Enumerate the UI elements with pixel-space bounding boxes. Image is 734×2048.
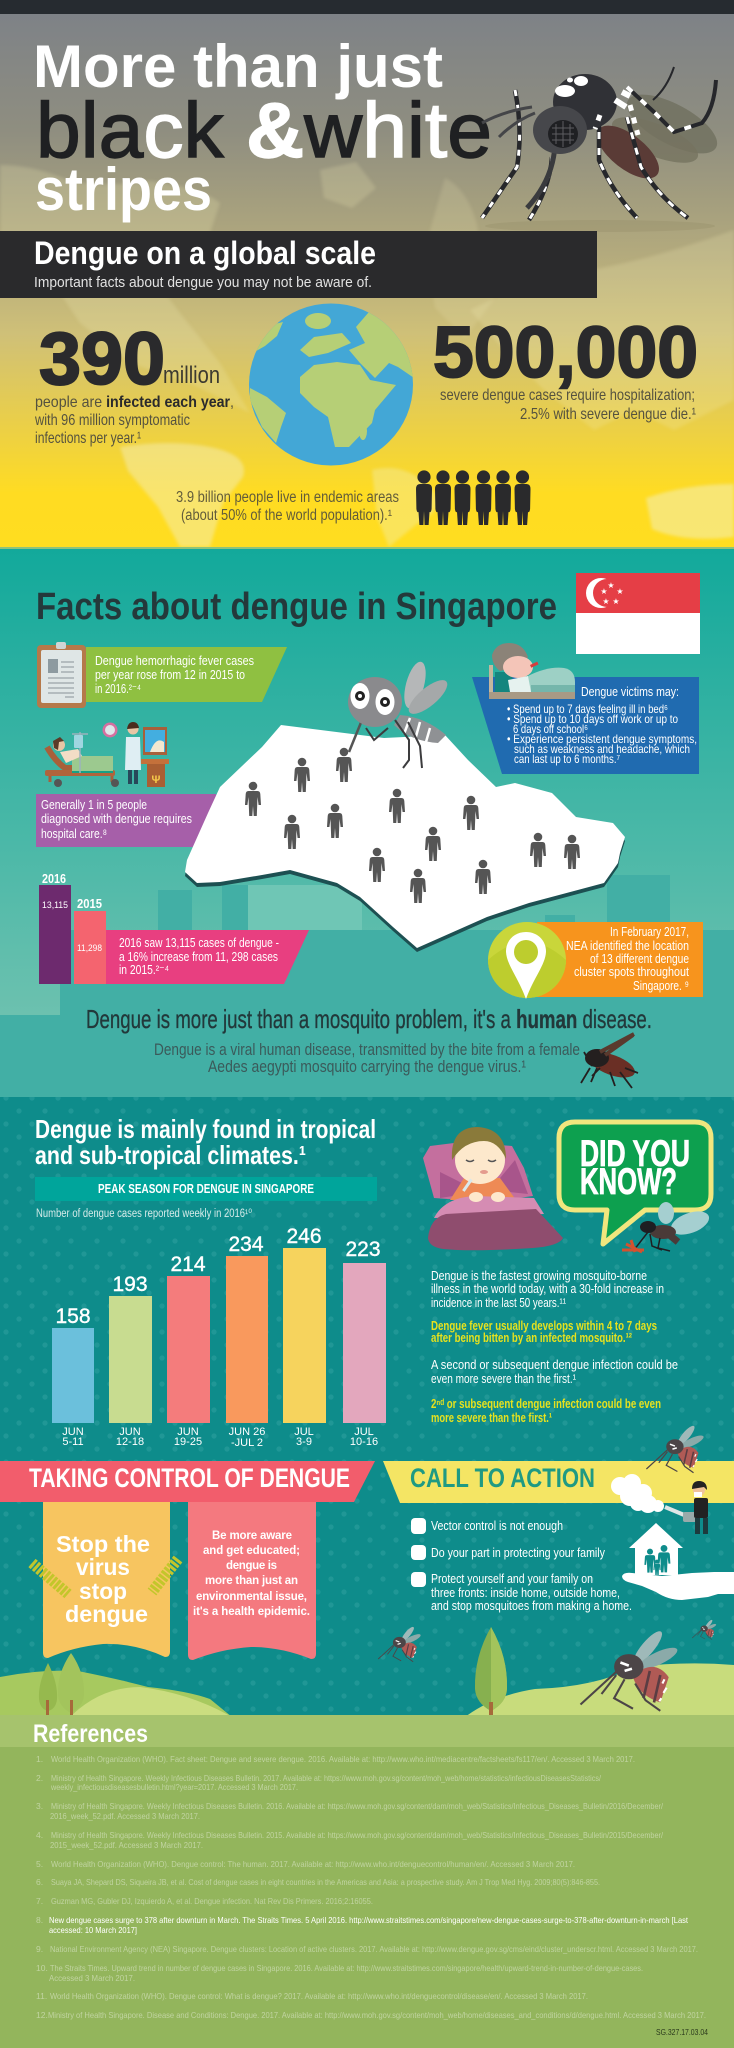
callout: 2016 cases increase: 2016 saw 13,115 cases of dengue -	[119, 935, 279, 950]
bar chart: weekly dengue cases: JUL	[354, 1426, 374, 1438]
callout: dengue victims may: such as weakness and headache, which	[514, 742, 690, 756]
panel: references: Guzman MG, Gubler DJ, Izquierdo A, et al. Dengue infection. Nat Rev Dis Primers. 2016;2:16055.	[51, 1896, 373, 1906]
bar chart: weekly dengue cases: 246	[286, 1225, 322, 1248]
bar chart: weekly dengue cases	[36, 1208, 386, 1449]
banner: call to action: CALL TO ACTION	[410, 1463, 595, 1493]
bar chart: weekly dengue cases: 19-25	[174, 1436, 202, 1448]
panel: references: SG.327.17.03.04	[656, 2027, 708, 2037]
icon: house with family	[629, 1523, 683, 1575]
text block: did you know facts: more severe than the first.¹	[431, 1410, 552, 1425]
panel: references: World Health Organization (WHO). Dengue control: What is dengue? 2017. Available at: http://www.who.int/denguecontrol/disease/en/. Accessed 3 March 2017.	[50, 1991, 588, 2001]
panel: references: World Health Organization (WHO). Dengue control: The human. 2017. Available at: http://www.who.int/denguecontrol/human/en/. Accessed 3 March 2017.	[51, 1859, 575, 1869]
banner: call to action	[383, 1461, 734, 1503]
title: black &white	[36, 86, 492, 174]
panel: references: World Health Organization (WHO). Fact sheet: Dengue and severe dengue. 2016. Available at: http://www.who.int/mediacentre/factsheets/fs117/en/. Accessed 3 March 2017.	[51, 1754, 635, 1764]
icon: mosquito top right	[646, 1424, 705, 1473]
ribbon: be more aware: it's a health epidemic.	[193, 1606, 310, 1618]
chart: 2016 vs 2015 cases	[39, 871, 106, 984]
callout: hospital care: hospital care.⁸	[41, 826, 107, 841]
text block: did you know facts: A second or subsequent dengue infection could be	[431, 1357, 678, 1372]
icon: mosquito center	[378, 1625, 422, 1662]
text block: did you know facts	[431, 1268, 678, 1425]
panel: references: The Straits Times. Upward trend in number of dengue cases in Singapore. 2016. Available at: http://www.straitstimes.com/singapore/health/upward-trend-in-number-of-dengue-cases.	[50, 1963, 643, 1973]
panel: references	[0, 1715, 734, 2048]
bar chart: weekly dengue cases: 214	[170, 1253, 206, 1276]
checklist: call to action items: and stop mosquitoes from making a home.	[431, 1598, 632, 1613]
checklist: call to action items	[411, 1518, 632, 1613]
callout: dengue victims may: • Experience persistent dengue symptoms,	[507, 732, 697, 746]
checklist: call to action items: three fronts: inside home, outside home,	[431, 1585, 620, 1600]
callout: hemorrhagic fever cases: per year rose from 12 in 2015 to	[95, 667, 245, 682]
ribbon: be more aware: environmental issue,	[196, 1591, 307, 1603]
checklist: call to action items: Vector control is not enough	[431, 1518, 563, 1533]
panel: references: 5.	[36, 1859, 43, 1869]
panel: references: 2016_week_52.pdf. Accessed 3 March 2017.	[50, 1811, 200, 1821]
panel: references: accessed: 10 March 2017]	[49, 1925, 137, 1935]
callout: dengue victims may: Dengue victims may:	[581, 684, 679, 699]
callout: dengue cluster spots: NEA identified the location	[566, 939, 689, 953]
panel: references: 11.	[36, 1991, 47, 2001]
callout: dengue cluster spots: In February 2017,	[610, 925, 689, 939]
stat: 3.9 billion people	[176, 470, 530, 525]
callout: dengue cluster spots: cluster spots throughout	[574, 965, 689, 979]
callout: 2016 cases increase: in 2015.²⁻⁴	[119, 962, 169, 977]
icon: sick woman in bed	[489, 643, 575, 699]
banner: peak season: PEAK SEASON FOR DENGUE IN SINGAPORE	[98, 1181, 314, 1196]
panel: tropical climates background	[0, 1097, 734, 1717]
callout: hemorrhagic fever cases: in 2016.²⁻⁴	[95, 681, 141, 696]
stat: 390 million: million	[163, 362, 220, 389]
section banner: dengue on a global scale: Important facts about dengue you may not be aware of.	[34, 274, 372, 291]
chart: 2016 vs 2015 cases: 13,115	[42, 900, 68, 910]
panel: references: 2015_week_52.pdf. Accessed 3 March 2017.	[50, 1840, 203, 1850]
ribbon: be more aware: dengue is	[226, 1560, 277, 1572]
icon: left laurel	[32, 1563, 68, 1594]
bar chart: weekly dengue cases: 223	[345, 1238, 381, 1261]
bar chart: weekly dengue cases: -JUL 2	[231, 1437, 263, 1449]
callout: dengue victims may: • Spend up to 10 days off work or up to	[507, 712, 678, 726]
text block: did you know facts: Dengue fever usually develops within 4 to 7 days	[431, 1318, 657, 1333]
text block: did you know facts: illness in the world today, with a 30-fold increase in	[431, 1281, 664, 1296]
bar chart: weekly dengue cases: 10-16	[350, 1436, 378, 1448]
callout: hemorrhagic fever cases: Dengue hemorrhagic fever cases	[95, 653, 254, 668]
icon: open hand	[622, 1572, 734, 1600]
chart: 2016 vs 2015 cases: 11,298	[77, 943, 102, 953]
callout: did you know bubble: DID YOU	[580, 1133, 690, 1174]
banner: taking control of dengue: TAKING CONTROL OF DENGUE	[29, 1463, 350, 1493]
panel: references: weekly_infectiousdiseasesbulletin.html?year=2017. Accessed 3 March 2017.	[50, 1782, 298, 1792]
banner: peak season	[35, 1177, 377, 1201]
icon: cartoon mosquito	[348, 659, 452, 768]
panel: references: 10.	[36, 1963, 48, 1973]
bar chart: weekly dengue cases: JUN	[62, 1426, 84, 1438]
ribbon: stop the virus	[43, 1502, 170, 1658]
icon: small dark mosquito	[581, 1034, 638, 1088]
callout: dengue victims may: • Spend up to 7 days feeling ill in bed⁶	[507, 702, 668, 716]
callout: hospital care: diagnosed with dengue requires	[41, 811, 192, 826]
callout: hospital care: Generally 1 in 5 people	[41, 797, 147, 812]
stat: 390 million: people are infected each year,	[35, 394, 234, 411]
panel: Singapore background and skyline	[0, 547, 734, 1097]
callout: did you know bubble	[559, 1122, 711, 1244]
chart: 2016 vs 2015 cases: 2016	[42, 871, 66, 886]
bar chart: weekly dengue cases: JUN	[119, 1426, 141, 1438]
bar chart: weekly dengue cases: 3-9	[296, 1436, 312, 1448]
callout: 2016 cases increase	[106, 930, 309, 984]
heading: tropical climates: and sub-tropical climates.¹	[35, 1140, 306, 1170]
checklist: call to action items: Do your part in protecting your family	[431, 1545, 605, 1560]
panel: references: 4.	[36, 1830, 43, 1840]
callout: dengue cluster spots: of 13 different dengue	[590, 952, 689, 966]
ribbon: stop the virus: dengue	[65, 1601, 148, 1627]
callout: dengue cluster spots	[537, 922, 703, 997]
text block: human disease	[86, 1004, 652, 1076]
section banner: dengue on a global scale: Dengue on a global scale	[34, 235, 376, 271]
bar chart: weekly dengue cases: JUN	[177, 1426, 199, 1438]
callout: did you know bubble: KNOW?	[580, 1161, 677, 1202]
panel: references: 8.	[36, 1915, 43, 1925]
panel: global scale background	[0, 0, 734, 547]
stat: 3.9 billion people: 3.9 billion people live in endemic areas	[176, 489, 399, 506]
bar chart: weekly dengue cases: 193	[112, 1273, 148, 1296]
bar chart: weekly dengue cases: 12-18	[116, 1436, 144, 1448]
panel: references: Accessed 3 March 2017.	[49, 1973, 135, 1983]
text block: did you know facts: even more severe than the first.¹	[431, 1371, 577, 1386]
chart: 2016 vs 2015 cases: 2015	[77, 896, 102, 911]
banner: taking control of dengue	[0, 1461, 375, 1502]
icon: hospital patient and doctor	[45, 722, 169, 787]
title: More than just	[33, 33, 443, 100]
ribbon: stop the virus: stop	[79, 1578, 127, 1604]
ribbon: be more aware: Be more aware	[212, 1530, 292, 1542]
icon: fogging man with smoke cloud	[611, 1474, 708, 1534]
text block: did you know facts: Dengue is the fastest growing mosquito-borne	[431, 1268, 647, 1283]
bar chart: weekly dengue cases: 158	[55, 1305, 91, 1328]
icon: sick boy in bed	[423, 1127, 563, 1250]
icon: location pin	[488, 922, 566, 999]
icon: Singapore flag: ★	[600, 587, 608, 596]
icon: Singapore flag: ★	[616, 587, 624, 596]
callout: hospital care	[36, 794, 216, 847]
stat: 390 million: 390	[39, 317, 165, 400]
panel: references: References	[33, 1720, 148, 1748]
icon: mosquito far right	[692, 1619, 717, 1640]
title	[33, 33, 492, 223]
text block: human disease: Dengue is a viral human disease, transmitted by the bite from a female	[154, 1040, 580, 1059]
icon: Singapore flag: ★	[607, 581, 615, 590]
icon: globe	[249, 304, 417, 466]
bar chart: weekly dengue cases: 234	[228, 1233, 264, 1256]
callout: 2016 cases increase: a 16% increase from 11, 298 cases	[119, 949, 278, 964]
callout: dengue cluster spots: Singapore. ⁹	[633, 979, 689, 993]
bar chart: weekly dengue cases: JUN 26	[229, 1426, 265, 1438]
ribbon: be more aware	[188, 1502, 316, 1660]
panel: references: 2.	[36, 1773, 43, 1783]
ribbon: be more aware: more than just an	[205, 1575, 298, 1587]
heading: facts about dengue in Singapore: Facts about dengue in Singapore	[36, 586, 557, 628]
stat: 390 million: with 96 million symptomatic	[34, 412, 190, 429]
text block: did you know facts: 2ⁿᵈ or subsequent dengue infection could be even	[431, 1396, 661, 1411]
bar chart: weekly dengue cases: 5-11	[62, 1436, 84, 1448]
bar chart: weekly dengue cases: JUL	[294, 1426, 314, 1438]
panel: references: Ministry of Health Singapore. Weekly Infectious Diseases Bulletin. 2017. Available at: https://www.moh.gov.sg/content/moh_web/home/statistics/infectiousDiseasesStatistics/	[51, 1773, 602, 1783]
stat: 500,000: 2.5% with severe dengue die.¹	[520, 406, 696, 423]
panel: hills and trees	[0, 1627, 734, 1717]
panel: references: 3.	[36, 1801, 43, 1811]
panel: references: 6.	[36, 1877, 43, 1887]
icon: realistic aedes mosquito	[482, 67, 726, 232]
heading: tropical climates: Dengue is mainly found in tropical	[35, 1114, 376, 1144]
panel: references: 1.	[36, 1754, 43, 1764]
panel: references: 9.	[36, 1944, 43, 1954]
panel: references: 12.	[36, 2010, 48, 2020]
panel: references: 7.	[36, 1896, 43, 1906]
callout: dengue victims may	[472, 677, 699, 774]
checklist: call to action items: Protect yourself and your family on	[431, 1571, 593, 1586]
text block: human disease: Aedes aegypti mosquito carrying the dengue virus.¹	[208, 1057, 526, 1076]
text block: human disease: Dengue is more just than a mosquito problem, it's a human disease.	[86, 1004, 652, 1034]
icon: large mosquito on hill	[580, 1628, 680, 1711]
icon: clipboard	[37, 642, 86, 708]
title: stripes	[35, 156, 212, 223]
section banner: dengue on a global scale	[0, 231, 597, 298]
stat: 390 million: infections per year.¹	[35, 430, 141, 447]
stat: 500,000: 500,000	[433, 313, 698, 393]
ribbon: stop the virus: Stop the	[56, 1531, 150, 1557]
bar chart: weekly dengue cases: Number of dengue cases reported weekly in 2016¹⁰	[36, 1208, 252, 1220]
stat: 390 million	[34, 317, 234, 447]
callout: hemorrhagic fever cases	[86, 647, 287, 702]
callout: dengue victims may: 6 days off school⁶	[513, 722, 588, 736]
ribbon: be more aware: and get educated;	[203, 1545, 300, 1557]
icon: right laurel	[152, 1559, 178, 1592]
icon: Singapore flag: ★	[602, 597, 610, 606]
ribbon: stop the virus: virus	[76, 1554, 130, 1580]
icon: Singapore flag	[576, 573, 700, 654]
heading: tropical climates	[35, 1114, 376, 1170]
icon: hospital patient and doctor: Ψ	[152, 774, 161, 786]
icon: Singapore flag: ★	[612, 597, 620, 606]
text block: did you know facts: after being bitten by an infected mosquito.¹²	[431, 1330, 632, 1345]
panel: references: Suaya JA, Shepard DS, Siqueira JB, et al. Cost of dengue cases in eight countries in the Americas and Asia: a prospective study. Am J Trop Med Hyg. 2009;80(5):846-855.	[51, 1877, 600, 1887]
map: Singapore island	[185, 725, 625, 952]
callout: dengue victims may: can last up to 6 months.⁷	[514, 752, 620, 766]
text block: did you know facts: incidence in the last 50 years.¹¹	[431, 1295, 566, 1310]
icon: mosquito on bubble	[622, 1202, 712, 1252]
stat: 3.9 billion people: (about 50% of the world population).¹	[181, 507, 392, 524]
